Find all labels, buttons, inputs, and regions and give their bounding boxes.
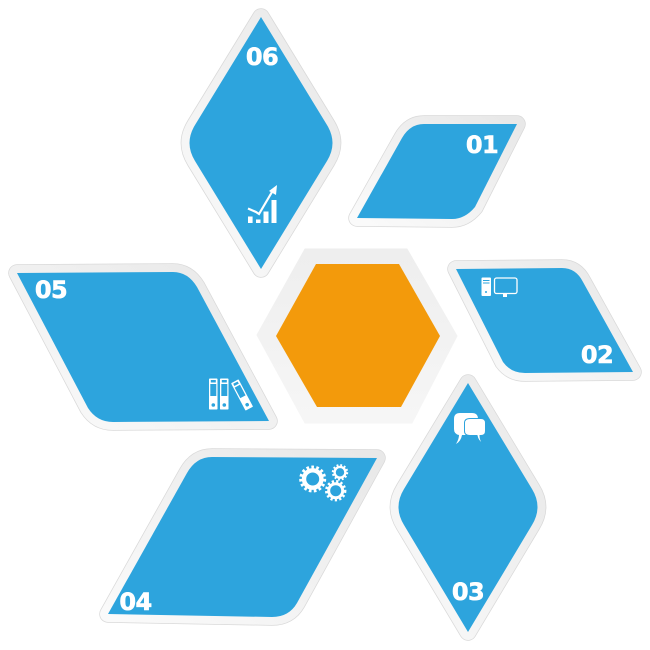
number 05: 05 [35, 276, 67, 304]
icon: gears [301, 465, 347, 500]
panel 05 [17, 272, 269, 422]
panel 03 [398, 383, 538, 632]
icon: speech bubbles [454, 413, 486, 444]
panel 02 [456, 268, 633, 373]
panel 01 [357, 124, 517, 219]
icon: growth chart [248, 185, 277, 223]
number 03: 03 [452, 578, 484, 606]
icon: binders [209, 378, 253, 411]
number 02: 02 [581, 341, 613, 369]
number 04: 04 [119, 588, 152, 616]
central hexagon [257, 249, 457, 423]
panel 04 [108, 457, 377, 617]
number 01: 01 [466, 131, 498, 159]
icon: computer [482, 278, 517, 297]
number 06: 06 [246, 43, 278, 71]
panel 06 [190, 17, 332, 269]
